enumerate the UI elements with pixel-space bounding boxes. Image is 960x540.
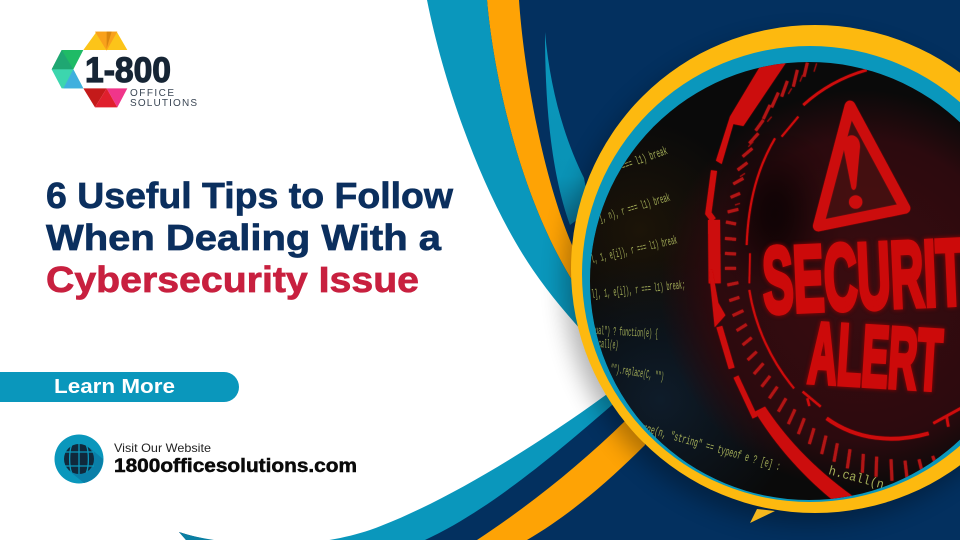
teal wedge at bottom edge: [179, 532, 214, 540]
photo background: [580, 50, 960, 510]
title: Cybersecurity Issue: [46, 259, 419, 300]
ring shadow: [564, 36, 960, 524]
logo: 1-800 Office Solutions: [52, 32, 197, 109]
yellow ring: [571, 25, 960, 513]
inner teal spike: [545, 32, 590, 225]
code lines: rge(n, "string" == typeof e ? [e] :: [641, 421, 782, 474]
code lines: l], 1, e[i]), r === l1) break;: [591, 278, 686, 302]
upper orange band: [487, 0, 600, 300]
swoosh: upper and lower coloured bands: [300, 0, 645, 540]
teal inner ring: [582, 46, 960, 502]
code lines: [592, 146, 883, 489]
title: When Dealing With a: [46, 217, 442, 258]
learn more button: [0, 372, 239, 402]
website url: 1800officesolutions.com: [114, 456, 357, 477]
HUD dial: upper half: [708, 62, 867, 283]
speech bubble tail: [750, 509, 775, 523]
code lines: "").replace(C, ""): [609, 362, 665, 384]
logo hexagon mark: [52, 32, 127, 107]
title: [46, 175, 454, 300]
code lines: call(e): [598, 337, 619, 353]
logo subtitle: solutions: SOLUTIONS: [130, 98, 197, 109]
code lines: === l1) break: [620, 144, 669, 174]
warning triangle icon: [818, 106, 905, 226]
logo subtitle: office: OFFICE: [130, 88, 174, 99]
icon: globe: [54, 434, 104, 484]
white content panel: [0, 0, 620, 540]
code lines: ual") ? function(e) {: [595, 324, 658, 341]
code lines: ], n), r === l1) break: [597, 191, 672, 226]
code lines: l, 1, e[i]), r === l1) break: [590, 233, 679, 267]
code lines: h.call(n, e: [827, 463, 906, 498]
website label: Visit Our Website: [114, 441, 211, 455]
logo wordmark: 1-800: [85, 51, 171, 90]
lower orange band: [477, 410, 645, 540]
ALERT text: ALERT: [806, 305, 945, 409]
HUD dial: lower half: [711, 270, 960, 503]
title: 6 Useful Tips to Follow: [46, 175, 454, 216]
upper teal band: [420, 0, 600, 345]
learn more button: Learn More: [54, 376, 175, 398]
lower teal band: [300, 385, 630, 540]
photo: security alert: [580, 50, 960, 510]
